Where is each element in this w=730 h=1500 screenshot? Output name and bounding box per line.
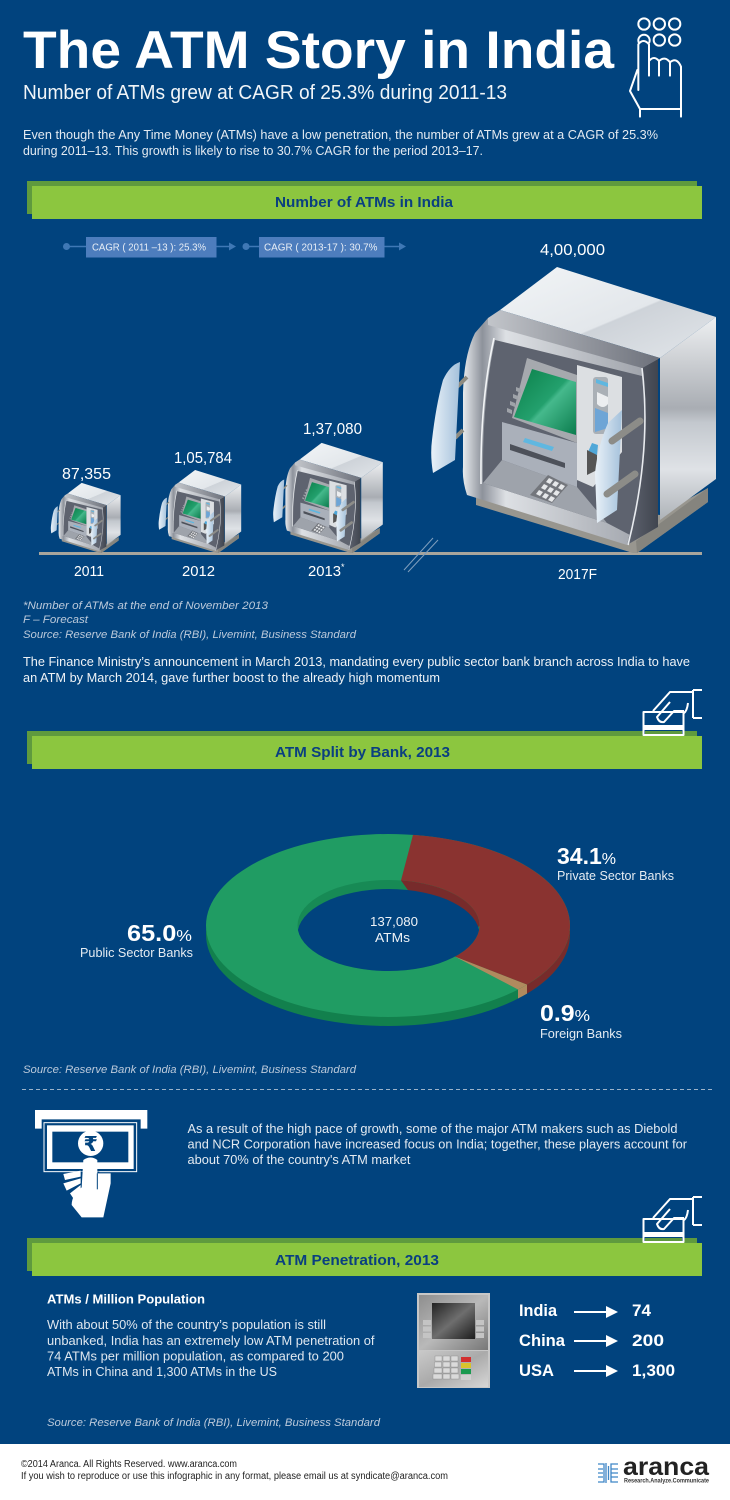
ATM 2017F bbox=[431, 267, 716, 553]
intro paragraph bbox=[23, 128, 658, 158]
year labels: * bbox=[341, 562, 345, 572]
ATM makers paragraph: As a result of the high pace of growth, some of the major ATM makers such as Diebold bbox=[188, 1122, 678, 1136]
value labels: 4,00,000 bbox=[540, 242, 605, 259]
icon: hand inserting card bbox=[644, 690, 702, 735]
penetration comparison: USA: USA bbox=[519, 1361, 554, 1380]
logo mark bbox=[598, 1463, 618, 1483]
penetration paragraph bbox=[47, 1318, 375, 1379]
donut hole bbox=[298, 880, 480, 980]
footnotes: F – Forecast bbox=[23, 614, 89, 626]
footer copyright text: If you wish to reproduce or use this infographic in any format, please email us at syndicate@aranca.com bbox=[21, 1471, 448, 1482]
label: private sector banks: Private Sector Banks bbox=[557, 869, 674, 883]
icon: hand taking rupee note bbox=[35, 1110, 147, 1217]
penetration comparison: USA bbox=[519, 1361, 675, 1380]
value labels: 1,37,080 bbox=[303, 421, 362, 438]
donut centre label: ATMs bbox=[375, 930, 411, 945]
donut centre label: 137,080 bbox=[370, 914, 418, 929]
icon: hand pressing keypad bbox=[630, 18, 681, 117]
value labels: 1,05,784 bbox=[174, 450, 232, 467]
aranca logo: Research.Analyze.Communicate bbox=[624, 1478, 709, 1484]
label: foreign banks bbox=[540, 1000, 622, 1041]
year labels: 2017F bbox=[558, 567, 597, 583]
ATM 2011 bbox=[51, 483, 121, 553]
value labels: 87,355 bbox=[62, 466, 111, 483]
CAGR timeline: CAGR ( 2013-17 ): 30.7% bbox=[264, 242, 378, 254]
penetration comparison: USA: 1,300 bbox=[632, 1361, 675, 1380]
penetration comparison: China: 200 bbox=[632, 1331, 664, 1350]
label: foreign banks: Foreign Banks bbox=[540, 1027, 622, 1041]
penetration comparison: China bbox=[519, 1331, 664, 1350]
year labels: 2012 bbox=[182, 564, 215, 580]
aranca logo: aranca bbox=[623, 1453, 710, 1481]
finance ministry paragraph: an ATM by March 2014, gave further boost to the already high momentum bbox=[23, 671, 440, 685]
segment: foreign banks 0.9% bbox=[455, 957, 527, 990]
intro paragraph: during 2011–13. This growth is likely to rise to 30.7% CAGR for the period 2013–17. bbox=[23, 144, 483, 158]
label: public sector banks: 65.0 % bbox=[127, 920, 192, 946]
title: The ATM Story in India bbox=[23, 21, 615, 80]
chart baseline bbox=[39, 552, 702, 555]
year labels bbox=[74, 562, 597, 583]
banner: Number of ATMs in India bbox=[27, 181, 702, 219]
banner: ATM Split by Bank: ATM Split by Bank, 2013 bbox=[275, 745, 450, 761]
source note: penetration: Source: Reserve Bank of India (RBI), Livemint, Business Standard bbox=[47, 1417, 381, 1429]
penetration heading: ATMs / Million Population bbox=[47, 1292, 205, 1306]
value labels bbox=[62, 242, 605, 483]
segment: public sector banks 65.0% bbox=[206, 834, 570, 1017]
segment: private sector banks 34.1% bbox=[401, 835, 570, 985]
footnotes bbox=[23, 600, 357, 641]
ATM 2013 bbox=[273, 443, 383, 553]
CAGR timeline bbox=[63, 237, 406, 258]
penetration comparison: India bbox=[519, 1301, 652, 1320]
banner: ATM Penetration: ATM Penetration, 2013 bbox=[275, 1253, 439, 1269]
intro paragraph: Even though the Any Time Money (ATMs) have a low penetration, the number of ATMs grew at a CAGR of 25.3% bbox=[23, 128, 658, 142]
aranca logo bbox=[598, 1453, 710, 1484]
source note: split: Source: Reserve Bank of India (RBI), Livemint, Business Standard bbox=[23, 1064, 357, 1076]
label: foreign banks: 0.9% bbox=[540, 1000, 590, 1026]
year labels: 2011 bbox=[74, 564, 104, 580]
penetration comparison: India: 74 bbox=[632, 1301, 652, 1320]
footer bar bbox=[0, 1444, 730, 1500]
penetration comparison: India: India bbox=[519, 1301, 558, 1320]
penetration comparison: China: China bbox=[519, 1331, 566, 1350]
subtitle: Number of ATMs grew at CAGR of 25.3% during 2011-13 bbox=[23, 82, 507, 104]
label: private sector banks bbox=[557, 843, 674, 883]
footer copyright text: ©2014 Aranca. All Rights Reserved. www.aranca.com bbox=[21, 1459, 237, 1470]
donut centre label bbox=[370, 914, 418, 945]
banner: ATM Penetration bbox=[27, 1238, 702, 1276]
footnotes: *Number of ATMs at the end of November 2013 bbox=[23, 600, 269, 612]
icon: hand inserting card bbox=[644, 1197, 702, 1242]
footnotes: Source: Reserve Bank of India (RBI), Livemint, Business Standard bbox=[23, 629, 357, 641]
finance ministry paragraph: The Finance Ministry’s announcement in March 2013, mandating every public sector bank branch across India to have bbox=[23, 655, 690, 669]
axis break mark bbox=[404, 538, 438, 572]
year labels: 2013 bbox=[308, 564, 341, 580]
ATM makers paragraph: and NCR Corporation have increased focus on India; together, these players account for bbox=[188, 1138, 687, 1152]
footer copyright text bbox=[21, 1459, 448, 1482]
ATM makers paragraph: about 70% of the country's ATM market bbox=[188, 1153, 411, 1167]
ATM 2012 bbox=[159, 470, 241, 553]
banner: ATM Split by Bank bbox=[27, 731, 702, 769]
penetration paragraph: 74 ATMs per million population, as compared to 200 bbox=[47, 1350, 344, 1364]
ATM makers paragraph bbox=[188, 1122, 687, 1167]
ATM front panel illustration bbox=[417, 1293, 490, 1388]
label: private sector banks: 34.1% bbox=[557, 843, 616, 869]
label: public sector banks: Public Sector Banks bbox=[80, 946, 193, 960]
penetration paragraph: With about 50% of the country’s population is still bbox=[47, 1318, 326, 1332]
penetration paragraph: unbanked, India has an extremely low ATM penetration of bbox=[47, 1334, 375, 1348]
icon: hand taking rupee note: ₹ bbox=[83, 1132, 98, 1156]
donut chart bbox=[206, 834, 570, 1026]
CAGR timeline: CAGR ( 2011 –13 ): 25.3% bbox=[92, 242, 206, 254]
banner: Number of ATMs in India: Number of ATMs in India bbox=[275, 195, 454, 211]
finance ministry paragraph bbox=[23, 655, 690, 685]
penetration paragraph: ATMs in China and 1,300 ATMs in the US bbox=[47, 1365, 277, 1379]
label: public sector banks bbox=[80, 920, 193, 960]
donut side wall bbox=[206, 843, 570, 1026]
